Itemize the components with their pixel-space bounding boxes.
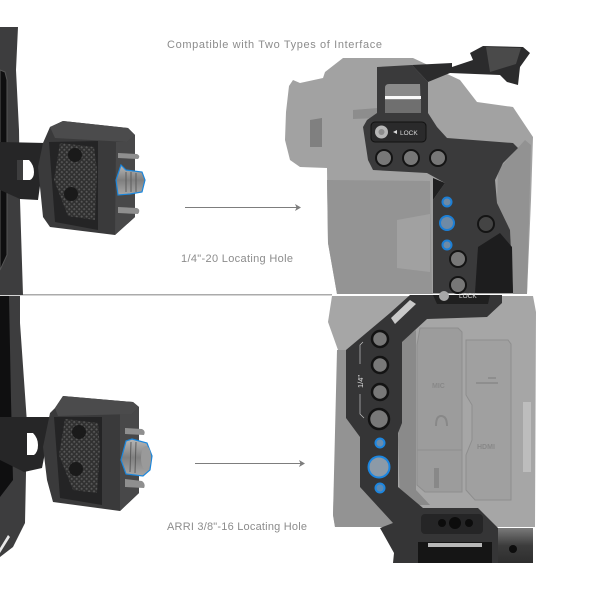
camera top view: grey camera with handle [285,46,533,294]
block [38,121,135,235]
blue ringed holes [440,198,454,250]
arrow bottom [195,460,305,467]
cage holes [369,331,389,429]
camera bottom view: grey camera with cage [328,291,536,563]
camera body silhouette [328,296,536,527]
lock label: LOCK [400,130,418,137]
top row holes [376,150,494,293]
camera body silhouette [285,58,533,294]
cage blue holes [368,438,390,492]
block [43,396,139,511]
connector module top [0,121,145,235]
screw [121,439,152,476]
quarter inch marking: 1/4" [356,375,365,388]
bottom screw plate [421,514,483,534]
camera bottom view: grey camera with cage: HDMI [477,444,495,451]
port labels: MIC [432,383,445,390]
left grip top [0,27,23,295]
screw [116,165,145,195]
cage top slot [391,300,416,324]
cage lock label: LOCK [459,293,477,300]
cage frame [346,295,502,563]
arrow top [185,204,301,211]
cold shoe slot [385,84,421,113]
arm [0,417,52,472]
knurled wheel [54,143,97,220]
handle top shoe [412,46,530,85]
left grip bottom [0,296,27,557]
knurled wheel [59,419,100,493]
caption top: 1/4"-20 Locating Hole [181,253,293,265]
connector module bottom [0,396,152,511]
arm [0,142,46,200]
title: Compatible with Two Types of Interface [167,39,382,51]
caption bottom: ARRI 3/8"-16 Locating Hole [167,521,307,533]
grip handle [363,65,518,293]
lock plate [371,122,426,142]
cage top lock plate [433,295,490,304]
pins [125,428,145,488]
port doors [417,328,462,450]
divider line [0,294,332,296]
pins [118,153,139,214]
bottom rail [418,542,492,563]
